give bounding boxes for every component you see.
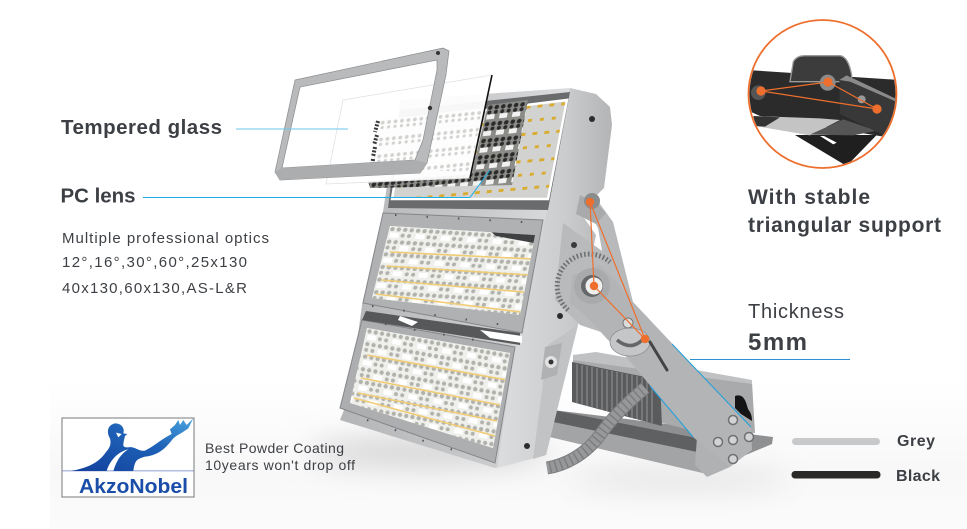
gap between modules [362, 311, 520, 345]
middle LED module [363, 213, 543, 333]
lower LED module [339, 320, 516, 464]
label: thickness: Thickness [748, 301, 844, 323]
floodlight product illustration [275, 48, 773, 477]
text block: powder coating: 10years won't drop off [205, 457, 355, 473]
value: 5mm: 5mm [748, 329, 807, 356]
housing side column [497, 88, 625, 468]
colour option: black: Black [896, 468, 940, 485]
text block: optics [62, 230, 269, 297]
leader line: thickness [690, 358, 850, 360]
logo: AkzoNobel [62, 418, 194, 498]
text block: optics: 12°,16°,30°,60°,25x130 [62, 254, 247, 271]
colour option: grey [792, 433, 935, 450]
floor background [50, 380, 967, 529]
heading: with stable triangular support: With stable [748, 186, 870, 209]
tempered glass pane [326, 75, 492, 184]
heading: with stable triangular support: triangular support [748, 214, 941, 237]
heading: with stable triangular support [748, 186, 941, 237]
text block: optics: Multiple professional optics [62, 230, 269, 247]
top LED module with yellow chips [388, 92, 570, 210]
logo figure [72, 418, 193, 471]
leader line: PC lens [143, 170, 490, 198]
driver box [550, 352, 773, 473]
power cable [547, 388, 645, 468]
text block: powder coating [205, 440, 355, 473]
inset orange triangle [756, 77, 882, 114]
front frame [275, 48, 449, 180]
text block: powder coating: Best Powder Coating [205, 440, 344, 456]
logo wordmark: AkzoNobel [79, 476, 188, 498]
detail inset: triangular support [747, 20, 900, 168]
leader line: tempered glass [236, 128, 348, 130]
lamp shadow [310, 436, 790, 490]
heading: PC lens: PC lens [60, 184, 136, 208]
triangular support marker on bracket [586, 198, 649, 343]
housing back plate [340, 88, 570, 468]
heading: tempered glass: Tempered glass [61, 116, 222, 139]
PC lens array [368, 100, 528, 188]
colour option: black [792, 468, 940, 485]
adjustable bracket [557, 193, 754, 477]
colour option: grey: Grey [897, 433, 935, 450]
text block: optics: 40x130,60x130,AS-L&R [62, 280, 247, 297]
